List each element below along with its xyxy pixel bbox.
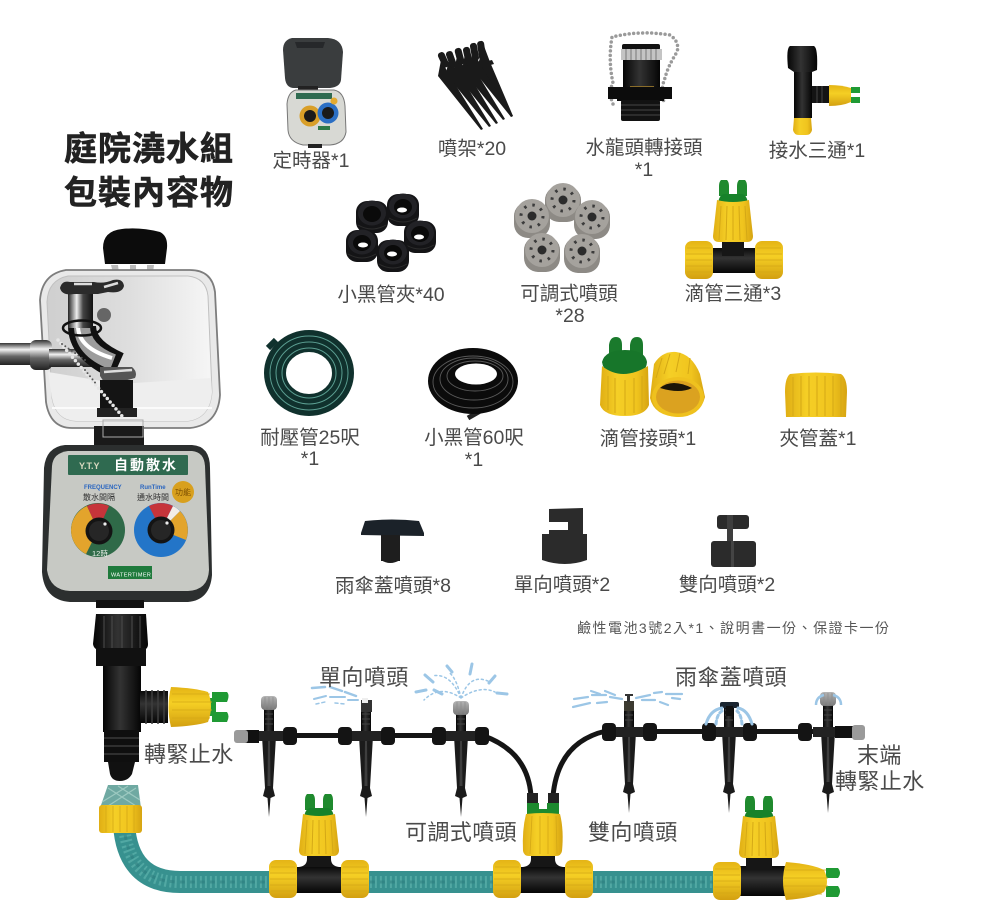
- hose yellow collar: [99, 805, 142, 833]
- label: 耐壓管25呎: [260, 427, 360, 449]
- illustration: left drip line with spray heads: [234, 664, 531, 817]
- function button: [172, 481, 194, 503]
- item: drip tee: [685, 180, 783, 305]
- icon: tube coil: [428, 348, 518, 418]
- label: 單向噴頭*2: [514, 574, 610, 596]
- illustration: drip tee 3 with end cap: [713, 796, 840, 900]
- item: small tube clips: [337, 194, 445, 306]
- illustration: tap tee connector: [93, 614, 228, 781]
- adjustable head 2: [453, 701, 469, 715]
- side drip cap: [168, 687, 228, 727]
- item: water tee: [769, 46, 865, 162]
- label: 雨傘蓋噴頭: 雨傘蓋噴頭: [675, 665, 787, 690]
- illustration: right drip line with spray heads: [553, 691, 865, 813]
- label: 雨傘蓋噴頭*8: [335, 575, 451, 597]
- label: *1: [635, 159, 653, 181]
- timer green banner: 自動散水: [114, 457, 178, 473]
- icon: timer housing: [42, 445, 212, 602]
- timer right dial labels: [137, 485, 169, 502]
- illustration: drip tee 1: [269, 794, 369, 898]
- timer left dial labels: FREQUENCY: [84, 485, 122, 491]
- icon: yellow sleeve: [650, 352, 705, 417]
- left dial: [71, 503, 125, 558]
- icon: adapter: [608, 33, 678, 121]
- label: 轉緊止水 right: 轉緊止水: [835, 769, 925, 794]
- label: *28: [555, 305, 585, 327]
- right end cap: [852, 725, 865, 740]
- item: double-direction nozzle: [679, 515, 775, 596]
- timer right dial labels: 通水時間: [137, 492, 169, 502]
- umbrella head: [720, 702, 739, 716]
- icon: small timer: [283, 38, 346, 148]
- icon: double nozzle: [711, 515, 756, 567]
- item: pressure hose: [260, 336, 360, 470]
- note: accessories: 鹼性電池3號2入*1、說明書一份、保證卡一份: [577, 620, 889, 636]
- title: 庭院澆水組 包裝內容物: [64, 130, 234, 211]
- label: 可調式噴頭: 可調式噴頭: [405, 820, 517, 845]
- water: single-direction spray: [312, 687, 358, 704]
- item: drip connector: [600, 337, 705, 450]
- right dial: [134, 503, 188, 557]
- label: [520, 283, 618, 327]
- icon: timer lid clasp: [103, 228, 167, 264]
- water: umbrella spray: [706, 708, 752, 724]
- icon: chrome faucet: [0, 280, 137, 417]
- illustration: garden hose: [99, 785, 730, 882]
- label: [585, 137, 703, 181]
- label: 滴管接頭*1: [600, 428, 696, 450]
- label: 定時器*1: [273, 150, 349, 172]
- item: black tube: [424, 348, 524, 471]
- icon: drip tee: [685, 180, 783, 279]
- single-direction head: [361, 698, 372, 712]
- timer left dial labels: 散水間隔: [83, 492, 115, 502]
- hose end braid: [100, 785, 141, 808]
- label: 水龍頭轉接頭: [585, 137, 703, 159]
- label: 轉緊止水 left: 轉緊止水: [144, 742, 234, 767]
- timer green banner: [68, 455, 188, 475]
- timer left dial labels: [83, 485, 122, 502]
- item: clamp cap: [780, 372, 856, 450]
- label: [260, 427, 360, 470]
- icon: cap: [785, 372, 847, 417]
- adjustable head 1: [261, 696, 277, 710]
- adjustable head 3: [820, 692, 836, 706]
- icon: nozzles: [514, 183, 610, 273]
- icon: single nozzle: [542, 508, 587, 564]
- water timer badge: WATERTIMER: [111, 572, 151, 578]
- label: 滴管三通*3: [685, 283, 781, 305]
- icon: hose coil: [268, 336, 348, 410]
- item: adjustable nozzles: [514, 183, 618, 327]
- label: 小黑管60呎: [424, 427, 524, 449]
- label: [424, 427, 524, 471]
- water timer badge: [108, 566, 152, 579]
- icon: clips: [346, 194, 436, 272]
- title: 庭院澆水組 包裝內容物: 庭院澆水組: [64, 130, 234, 167]
- title: 庭院澆水組 包裝內容物: 包裝內容物: [64, 174, 234, 211]
- label: 可調式噴頭: [520, 283, 618, 305]
- function button: 功能: [175, 487, 191, 497]
- label: 接水三通*1: [769, 140, 865, 162]
- icon: tee: [787, 46, 860, 135]
- label: 夾管蓋*1: [780, 428, 856, 450]
- illustration: drip tee 2: [493, 793, 593, 898]
- item: single-direction nozzle: [514, 508, 610, 596]
- water: end cap drip: [816, 695, 841, 705]
- left dial: 12時: [92, 549, 108, 558]
- label: 小黑管夾*40: [337, 284, 445, 306]
- water: double-direction spray: [573, 691, 682, 707]
- item: tap adapter: [585, 33, 703, 181]
- left end cap: [234, 730, 248, 743]
- icon: hinge: [94, 426, 144, 448]
- label: *1: [301, 448, 319, 470]
- item: timer: [273, 38, 349, 172]
- icon: umbrella nozzle: [361, 520, 424, 563]
- icon: stakes: [437, 41, 513, 130]
- label: 雙向噴頭*2: [679, 574, 775, 596]
- label: 單向噴頭: 單向噴頭: [319, 665, 409, 690]
- timer right dial labels: RunTime: [140, 485, 166, 491]
- water: adjustable spray: [416, 664, 507, 700]
- icon: green yellow cap: [600, 337, 649, 416]
- label: 末端: 末端: [857, 743, 902, 768]
- item: spray stakes: [437, 41, 513, 160]
- timer green banner: Y.T.Y: [79, 461, 100, 471]
- icon: clear lid: [40, 270, 220, 428]
- label: 雙向噴頭: 雙向噴頭: [588, 820, 678, 845]
- double-direction head: [624, 694, 634, 711]
- label: *1: [465, 449, 483, 471]
- item: umbrella nozzle: [335, 520, 451, 597]
- illustration: faucet with water timer: [0, 228, 220, 608]
- label: 噴架*20: [438, 138, 506, 160]
